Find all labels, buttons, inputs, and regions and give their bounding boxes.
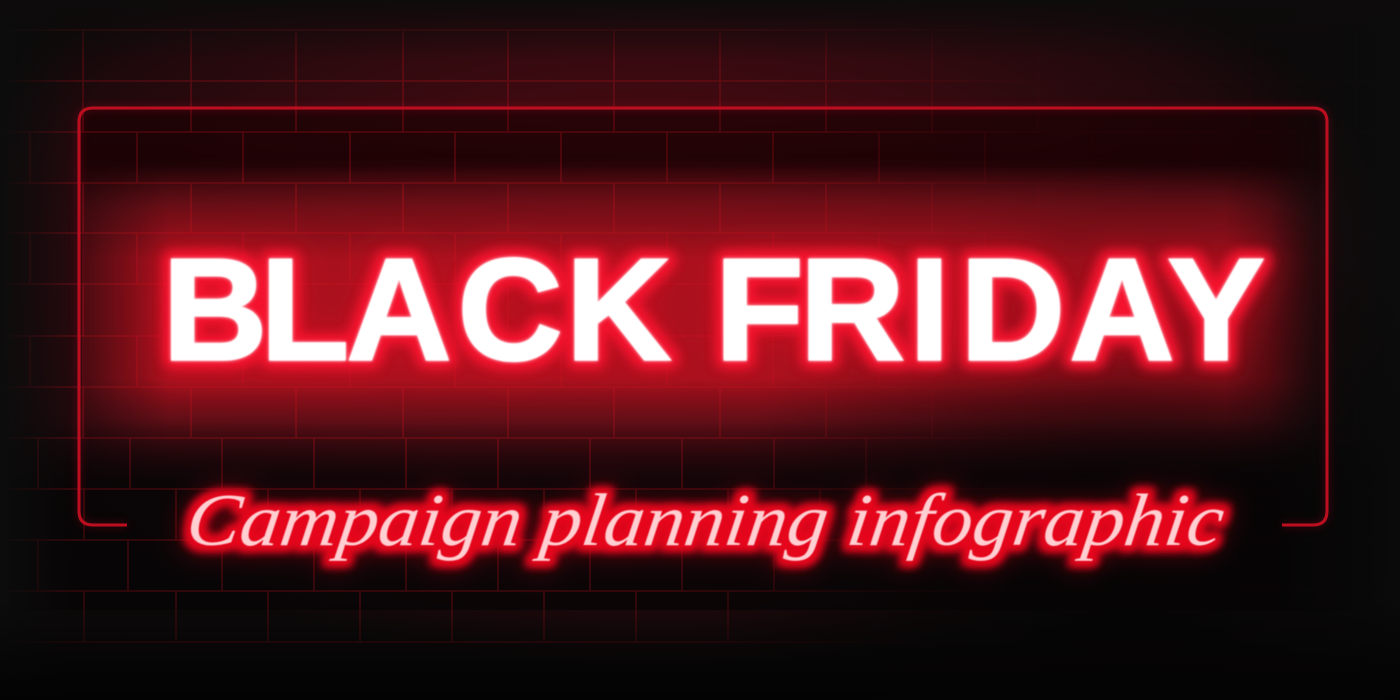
- wall edge vignettes: [0, 0, 70, 700]
- title: BLACK FRIDAY: BLACK FRIDAY: [162, 228, 1264, 390]
- red wall glow behind title: [82, 165, 1324, 480]
- dark shadow under frame: [0, 420, 1400, 610]
- subtitle: Campaign planning infographic: Campaign planning infographic: [182, 480, 1229, 562]
- neon frame: [79, 108, 1327, 525]
- brick mortar lines: [12, 29, 1028, 643]
- dark band inside the top of the frame: [81, 110, 1325, 205]
